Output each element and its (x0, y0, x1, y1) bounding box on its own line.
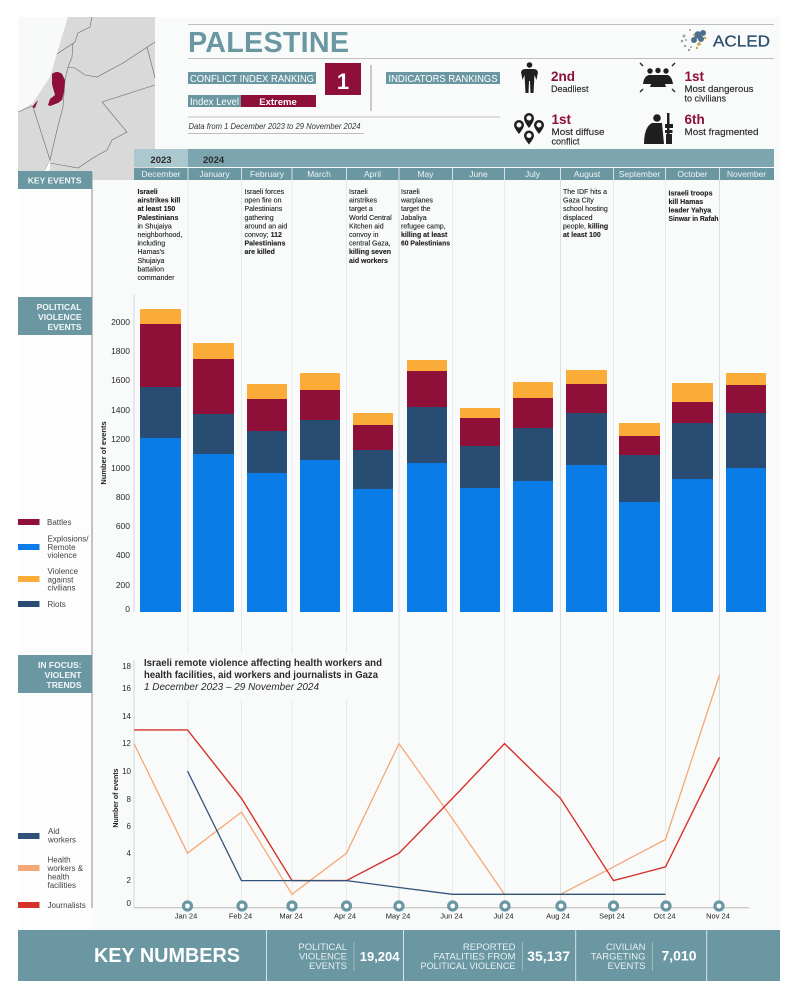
time axis labels: Oct 24 (653, 912, 676, 920)
West Bank and Gaza highlighted (32, 72, 65, 108)
conflict index ranking (188, 63, 361, 95)
event: August: people, killing (563, 223, 608, 230)
y axis labels: 800 (116, 492, 130, 502)
event: December: at least 150 (138, 206, 175, 213)
event: October: Israeli troops (668, 190, 713, 198)
event: August: school hosting (563, 206, 608, 213)
section label: political violence events: EVENTS (47, 322, 82, 332)
event: August: The IDF hits a (563, 189, 607, 196)
y axis labels: 1600 (111, 375, 130, 385)
month header: December (141, 169, 181, 179)
event: December: Shujaiya (138, 258, 164, 265)
indicators rankings label: INDICATORS RANKINGS (388, 74, 498, 85)
year band (134, 149, 774, 167)
y axis labels: 600 (116, 521, 130, 531)
legend: event types (18, 518, 89, 609)
legend: target groups: Journalists (48, 901, 86, 910)
August bar (566, 370, 607, 612)
event: April: World Central (349, 215, 392, 222)
event: December: including (138, 241, 165, 248)
December bar (140, 309, 181, 612)
event: May: Israeli (401, 189, 420, 196)
indicator: deadliest: Deadliest (551, 84, 589, 94)
event: December: neighborhood, (138, 232, 182, 239)
legend: target groups: Health (48, 856, 71, 864)
event: December: airstrikes kill (138, 198, 180, 205)
key numbers band (18, 930, 780, 981)
event: February: are killed (244, 249, 275, 256)
y axis labels (122, 662, 132, 908)
month header (134, 168, 774, 180)
event: October: leader Yahya (668, 208, 711, 214)
stat: reported fatalities: POLITICAL VIOLENCE (420, 961, 516, 972)
line chart title: health facilities, aid workers and journalists in Gaza (144, 669, 378, 681)
event: April: Kitchen aid (349, 223, 384, 230)
event: February: convoy; 112 (244, 232, 282, 239)
y axis labels: 16 (122, 684, 132, 693)
event: December: in Shujaiya (138, 223, 172, 230)
time axis labels: Sept 24 (599, 912, 625, 920)
event: April: airstrikes (349, 198, 378, 205)
event: May: Jabaliya (401, 215, 427, 222)
stat: political violence events: 19,204 (360, 949, 400, 964)
event: April: central Gaza, (349, 241, 391, 248)
icon: person (521, 62, 538, 93)
September bar (619, 423, 660, 612)
line chart title (144, 657, 382, 693)
event: August: displaced (563, 215, 593, 222)
ACLED logo: ACLED (713, 34, 770, 50)
y axis labels: 2 (127, 876, 132, 885)
indicator: most diffuse: Most diffuse (552, 127, 604, 137)
index level: Extreme (259, 97, 297, 108)
key numbers heading: KEY NUMBERS (94, 945, 240, 967)
event: April: killing seven (349, 249, 391, 256)
legend: event types: Violence (48, 567, 79, 576)
stat: reported fatalities (420, 942, 570, 972)
stat: political violence events: VIOLENCE (299, 952, 347, 962)
indicator: most diffuse: conflict (552, 136, 580, 146)
y axis title: Number of events (113, 768, 120, 828)
section label: political violence events: VIOLENCE (38, 312, 82, 322)
column gridlines (188, 180, 720, 907)
y axis labels: 1400 (111, 405, 130, 415)
event: April: Israeli (349, 189, 368, 196)
y axis labels: 18 (122, 662, 132, 671)
stat: political violence events: EVENTS (309, 961, 347, 972)
line chart title: Israeli remote violence affecting health workers and (144, 657, 382, 669)
event: May: warplanes (400, 198, 433, 205)
time axis labels: Jun 24 (440, 912, 463, 920)
indicator: most fragmented (644, 112, 758, 144)
indicator: dangerous to civilians: 1st (684, 69, 705, 84)
y axis labels: 4 (127, 849, 132, 858)
y axis labels: 1000 (111, 463, 130, 473)
time axis labels: Nov 24 (706, 912, 730, 920)
July bar (513, 382, 553, 612)
month header: September (619, 169, 660, 179)
line: journalists (134, 730, 720, 881)
month header: August (574, 169, 601, 179)
y axis labels: 0 (125, 604, 130, 614)
indicator: most diffuse: 1st (552, 112, 572, 127)
stat: political violence events (298, 942, 400, 972)
month header: February (250, 169, 285, 179)
November bar (726, 373, 766, 612)
month header: July (525, 169, 541, 179)
month header: October (677, 169, 708, 179)
section label: political violence events (18, 297, 92, 335)
section label: in focus violent trends: TRENDS (47, 680, 82, 690)
time axis labels: May 24 (386, 912, 410, 920)
time axis labels: Jul 24 (493, 912, 514, 920)
June bar (460, 408, 500, 612)
legend: target groups: facilities (48, 881, 76, 890)
event: December: Palestinians (138, 215, 178, 222)
month header: March (307, 169, 331, 179)
index level (188, 95, 316, 108)
event: February: gathering (244, 215, 274, 222)
map: Palestine location (18, 17, 155, 180)
line: aid workers (188, 771, 666, 894)
month header: June (469, 169, 488, 179)
legend: event types: Explosions/ (48, 534, 89, 544)
time axis labels: Jan 24 (175, 912, 197, 920)
icon: crowd (640, 63, 675, 92)
event: May: target the (401, 206, 431, 213)
indicator: deadliest: 2nd (551, 69, 575, 84)
legend: event types: against (48, 576, 74, 584)
rank badge: 1 (337, 69, 349, 94)
legend: target groups: workers & (46, 864, 84, 873)
legend: event types: civilians (48, 584, 76, 592)
January bar (193, 343, 234, 612)
indicator: most diffuse (514, 112, 604, 146)
indicator: dangerous to civilians: to civilians (684, 94, 727, 104)
event: October: Sinwar in Rafah (668, 216, 718, 223)
y axis labels: 400 (116, 550, 130, 560)
indicator: most fragmented: 6th (684, 112, 705, 127)
section label: in focus violent trends: IN FOCUS: (38, 660, 82, 670)
line chart title: 1 December 2023 – 29 November 2024 (144, 682, 319, 693)
February bar (247, 384, 287, 612)
y axis labels: 12 (122, 739, 132, 748)
icon: armed fighter (644, 113, 673, 144)
indicator: dangerous to civilians: Most dangerous (684, 84, 754, 94)
event: February: Palestinians (244, 206, 283, 213)
legend: target groups (18, 827, 86, 910)
y axis labels: 10 (122, 767, 132, 776)
event: December: Israeli (138, 189, 158, 196)
event: May: 60 Palestinians (401, 241, 450, 248)
month header: November (727, 169, 766, 179)
section label: political violence events: POLITICAL (37, 302, 82, 312)
ACLED logo (681, 29, 770, 51)
y axis labels: 1800 (111, 346, 130, 356)
line chart: violent trends (113, 660, 749, 920)
section label: in focus violent trends: VIOLENT (45, 670, 82, 680)
data period: Data from 1 December 2023 to 29 November 2024 (188, 122, 361, 131)
event: April: aid workers (349, 258, 388, 265)
event: August: Gaza City (563, 198, 594, 205)
time axis labels: Apr 24 (334, 912, 356, 920)
header rules (188, 24, 774, 134)
March bar (300, 373, 340, 612)
event: April: target a (349, 206, 373, 213)
stat: reported fatalities: FATALITIES FROM (434, 952, 516, 962)
bar chart: monthly political violence events (99, 295, 766, 614)
event: February: Palestinians (244, 241, 285, 248)
y axis labels: 200 (116, 580, 130, 590)
April bar (353, 413, 393, 612)
event: December: commander (138, 275, 175, 282)
event: February: around an aid (244, 223, 287, 230)
y axis labels: 1200 (111, 434, 130, 444)
y axis labels: 14 (122, 712, 132, 721)
y axis title: Number of events (99, 421, 108, 485)
time axis labels: Aug 24 (546, 912, 570, 920)
legend: event types: Riots (48, 600, 66, 609)
event: April: convoy in (349, 232, 379, 239)
year band: 2024 (203, 155, 225, 166)
section label: key events (18, 171, 92, 189)
legend: event types: violence (48, 551, 77, 560)
indicator: deadliest (521, 62, 589, 94)
section label: in focus violent trends (18, 655, 92, 693)
stat: civilian targeting events: 7,010 (661, 948, 697, 964)
legend: target groups: health (48, 872, 69, 882)
y axis labels: 0 (127, 899, 132, 908)
event: May: refugee camp, (401, 223, 446, 230)
legend: event types: Remote (48, 543, 76, 552)
time axis labels: Feb 24 (229, 912, 252, 920)
key events text (138, 189, 718, 282)
y axis labels: 2000 (111, 317, 130, 327)
icon: map pins (514, 113, 544, 144)
event: February: Israeli forces (244, 189, 285, 196)
legend: target groups: Aid (48, 827, 60, 836)
event: February: open fire on (244, 198, 282, 205)
stat: reported fatalities: 35,137 (527, 948, 570, 964)
legend: target groups: workers (47, 836, 76, 844)
time axis labels (175, 912, 730, 920)
indicator: dangerous to civilians (640, 63, 754, 104)
event: December: Hamas's (138, 249, 165, 256)
time axis labels: Mar 24 (279, 912, 303, 920)
October bar (672, 383, 713, 612)
conflict index ranking: CONFLICT INDEX RANKING (190, 74, 314, 85)
title: PALESTINE (188, 27, 349, 59)
legend: event types: Battles (47, 518, 71, 527)
stat: political violence events: POLITICAL (298, 942, 347, 953)
time axis markers (184, 902, 723, 910)
stat: reported fatalities: REPORTED (463, 942, 516, 953)
y axis labels: 6 (127, 822, 132, 831)
stat: civilian targeting events: TARGETING (591, 952, 646, 962)
section label: key events: KEY EVENTS (28, 176, 82, 186)
y axis labels: 8 (127, 795, 132, 804)
sidebar rule (91, 172, 93, 908)
month header: April (364, 169, 381, 179)
y axis labels (111, 317, 130, 614)
stat: civilian targeting events: CIVILIAN (606, 942, 646, 953)
event: August: at least 100 (563, 232, 601, 239)
event: May: killing at least (401, 232, 448, 239)
stat: civilian targeting events (591, 942, 697, 972)
stat: civilian targeting events: EVENTS (607, 961, 646, 972)
month header: May (417, 169, 434, 179)
event: December: battalion (138, 266, 164, 273)
index level: Index Level (190, 97, 239, 108)
rank badge (325, 63, 361, 95)
year band: 2023 (150, 155, 172, 166)
May bar (407, 360, 447, 612)
line: health workers (134, 675, 720, 894)
month header: January (199, 169, 230, 179)
event: October: kill Hamas (668, 199, 703, 206)
indicator: most fragmented: Most fragmented (684, 127, 758, 137)
